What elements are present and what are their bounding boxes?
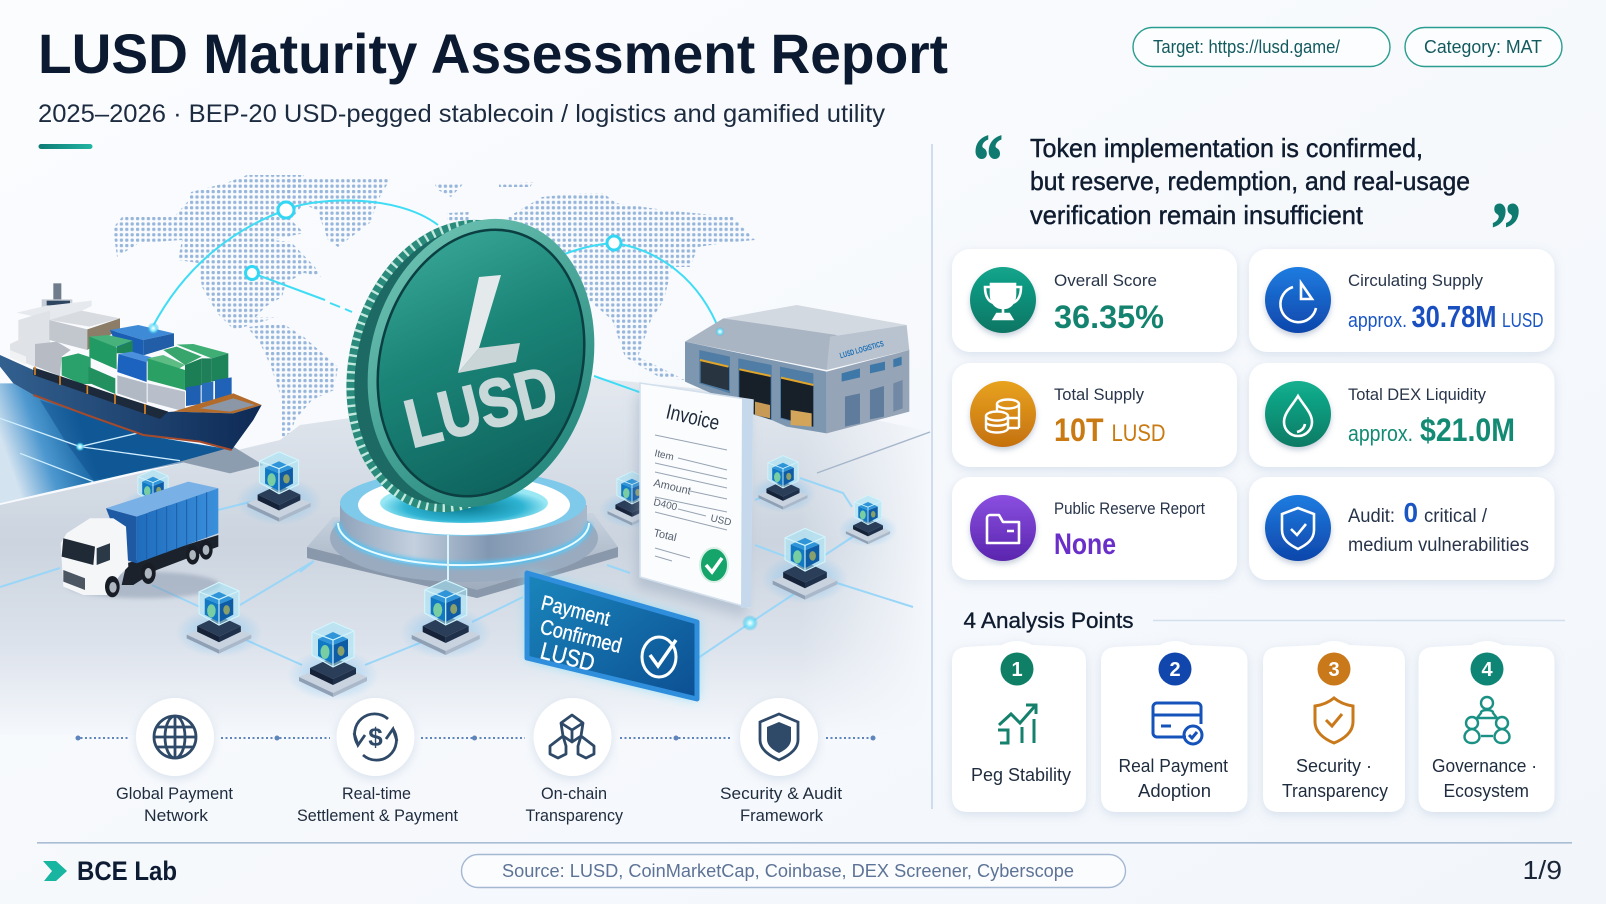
- target pill: [1133, 28, 1390, 66]
- payment confirmed card: [527, 573, 697, 699]
- card: overall score: 36.35%: [1054, 299, 1164, 335]
- accent bar: [38, 144, 92, 149]
- analysis card 1: peg stability: [952, 641, 1086, 812]
- card: circulating supply: Circulating Supply: [1348, 271, 1483, 290]
- invoice document: USD: [709, 513, 732, 529]
- warehouse: LUSD LOGISTICS: [839, 339, 885, 360]
- icon: cubes: [550, 715, 594, 758]
- feature: global payment network: [116, 698, 233, 825]
- BCE Lab logo: [43, 856, 177, 886]
- icon: shield check: [1315, 698, 1353, 743]
- card: total supply: 10T: [1054, 412, 1104, 448]
- card: circulating supply: 30.78M: [1412, 299, 1496, 334]
- analysis card 3: security transparency: Transparency: [1282, 781, 1388, 801]
- icon: dollar cycle: $: [368, 722, 383, 752]
- invoice document: Amount: [652, 477, 692, 497]
- analysis card 2: real payment adoption: 2: [1169, 659, 1181, 681]
- card: public reserve report: None: [1054, 528, 1116, 561]
- analysis card 4: governance ecosystem: [1418, 641, 1554, 812]
- cyan arcs over the map: [152, 200, 720, 393]
- card: audit: Audit:: [1348, 505, 1395, 527]
- analysis card 4: governance ecosystem: Ecosystem: [1444, 781, 1529, 801]
- container ship: [0, 283, 262, 450]
- icon: pie chart: [1280, 283, 1316, 322]
- category pill: [1405, 28, 1562, 66]
- feature: on-chain transparency: [526, 698, 624, 825]
- analysis card 1: peg stability: 1: [1011, 659, 1023, 681]
- icon: chart arrow: [998, 705, 1036, 743]
- feature: on-chain transparency: Transparency: [526, 807, 624, 825]
- card: total supply: Total Supply: [1054, 385, 1144, 404]
- pull quote: [973, 120, 1521, 271]
- card: total dex liquidity: $21.0M: [1420, 412, 1515, 448]
- icon: card check: [1153, 703, 1202, 744]
- feature: security and audit: Security & Audit: [720, 785, 842, 803]
- card: total supply: [952, 363, 1237, 467]
- card: total dex liquidity: approx.: [1348, 421, 1413, 446]
- feature: global payment network: Global Payment: [116, 785, 233, 803]
- category pill: Category: MAT: [1424, 37, 1542, 57]
- analysis points heading: 4 Analysis Points: [964, 608, 1134, 633]
- card: circulating supply: [1249, 249, 1554, 352]
- feature strip dotted connector: [76, 736, 876, 740]
- card: total dex liquidity: [1249, 363, 1554, 467]
- icon: water drop: [1284, 396, 1312, 436]
- blockchain nodes: front row: [175, 580, 492, 701]
- floor: [0, 378, 932, 735]
- network lines: [0, 432, 930, 665]
- icon: shield: [760, 714, 798, 760]
- card: audit: critical /: [1424, 505, 1488, 527]
- footer rule: [37, 842, 1572, 844]
- feature: real-time settlement: [297, 698, 458, 825]
- card: overall score: [952, 249, 1237, 352]
- world map dots: [113, 175, 755, 450]
- right panel divider: [931, 144, 933, 809]
- analysis card 4: governance ecosystem: Governance ·: [1432, 756, 1537, 776]
- card: public reserve report: Public Reserve Report: [1054, 499, 1205, 518]
- icon: dollar cycle: [354, 714, 397, 760]
- analysis card 2: real payment adoption: Real Payment: [1118, 756, 1228, 776]
- source pill: Source: LUSD, CoinMarketCap, Coinbase, DEX Screener, Cyberscope: [502, 861, 1074, 881]
- card: overall score: Overall Score: [1054, 271, 1157, 290]
- card: total supply: LUSD: [1112, 420, 1166, 447]
- coin L logo: [458, 275, 520, 373]
- title: LUSD Maturity Assessment Report: [38, 22, 948, 85]
- card: audit: [1249, 477, 1554, 580]
- pedestal: [307, 470, 618, 598]
- analysis card 3: security transparency: Security ·: [1296, 756, 1372, 776]
- invoice document: Total: [652, 527, 678, 544]
- icon: folder: [987, 515, 1019, 543]
- water: [0, 383, 263, 503]
- icon: coin stack: [986, 400, 1019, 432]
- card: audit: 0: [1404, 497, 1418, 528]
- analysis card 3: security transparency: 3: [1328, 659, 1340, 681]
- illustration: LUSD logistics payment scene: [0, 175, 932, 735]
- pull quote: “: [973, 120, 1003, 203]
- feature: real-time settlement: Settlement & Payment: [297, 807, 458, 825]
- coin: [321, 194, 624, 532]
- coin LUSD lettering: LUSD: [397, 352, 565, 463]
- blockchain nodes: back row: [120, 452, 898, 603]
- payment confirmed card: Confirmed: [538, 616, 624, 658]
- analysis card 1: peg stability: Peg Stability: [971, 765, 1071, 785]
- icon: globe: [154, 716, 196, 758]
- warehouse: [685, 305, 909, 433]
- pull quote: verification remain insufficient: [1030, 200, 1364, 230]
- pull quote: but reserve, redemption, and real-usage: [1030, 166, 1470, 196]
- BCE Lab logo: BCE Lab: [77, 856, 177, 886]
- invoice document: D400: [652, 497, 679, 513]
- analysis card 2: real payment adoption: Adoption: [1138, 781, 1211, 801]
- card: total dex liquidity: Total DEX Liquidity: [1348, 385, 1486, 404]
- pull quote: ”: [1491, 188, 1521, 271]
- card: circulating supply: approx.: [1348, 310, 1407, 332]
- feature: on-chain transparency: On-chain: [541, 785, 607, 803]
- icon: people network: [1464, 697, 1510, 743]
- truck: [61, 482, 220, 598]
- target pill: Target: https://lusd.game/: [1153, 37, 1340, 57]
- feature: security and audit: [720, 698, 842, 825]
- feature: security and audit: Framework: [740, 807, 824, 825]
- invoice document: [636, 383, 753, 618]
- payment confirmed card: LUSD: [538, 638, 597, 677]
- analysis card 4: governance ecosystem: 4: [1481, 659, 1493, 681]
- card: circulating supply: LUSD: [1502, 310, 1544, 332]
- icon: shield check: [1282, 508, 1314, 549]
- card: public reserve report: [952, 477, 1237, 580]
- icon: trophy: [985, 284, 1021, 319]
- subtitle: 2025–2026 · BEP-20 USD-pegged stablecoin / logistics and gamified utility: [38, 100, 886, 128]
- page number: 1/9: [1522, 855, 1562, 885]
- source pill: [462, 854, 1126, 888]
- card: audit: medium vulnerabilities: [1348, 534, 1529, 556]
- payment confirmed card: Payment: [539, 592, 612, 631]
- feature: global payment network: Network: [144, 807, 209, 825]
- pull quote: Token implementation is confirmed,: [1030, 133, 1423, 163]
- analysis card 2: real payment adoption: [1101, 641, 1248, 812]
- invoice document: Item: [653, 448, 675, 463]
- invoice document: Invoice: [664, 400, 722, 435]
- feature: real-time settlement: Real-time: [342, 785, 411, 803]
- analysis card 3: security transparency: [1263, 641, 1405, 812]
